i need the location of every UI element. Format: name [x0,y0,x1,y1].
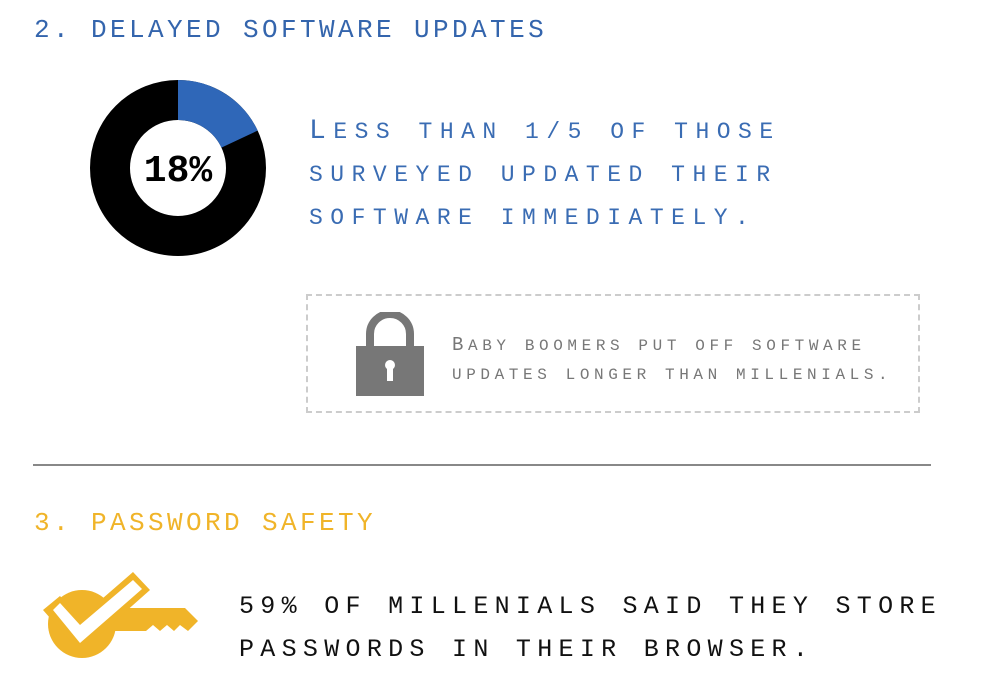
stat text: passwords: PASSWORDS IN THEIR BROWSER. [239,635,814,664]
stat text: software updates: LESS THAN 1/5 OF THOSE [309,116,781,147]
icon: key with checkmark [43,572,198,658]
icon: padlock [356,312,424,396]
stat text: software updates: SURVEYED UPDATED THEIR [309,162,778,188]
donut chart: 18%: 18% [144,150,212,193]
callout box: baby boomers [306,294,920,413]
title: section 3: 3. PASSWORD SAFETY [34,508,376,538]
title: section 2: 2. DELAYED SOFTWARE UPDATES [34,15,547,45]
callout text: BABY BOOMERS PUT OFF SOFTWARE [452,334,866,356]
donut chart: 18% [90,80,266,256]
stat text: passwords: 59% OF MILLENIALS SAID THEY STORE [239,592,942,621]
callout text [452,334,892,384]
callout text: UPDATES LONGER THAN MILLENIALS. [452,366,892,384]
stat text: software updates: SOFTWARE IMMEDIATELY. [309,205,756,231]
stat text: software updates [309,116,781,231]
stat text: passwords [239,592,942,664]
